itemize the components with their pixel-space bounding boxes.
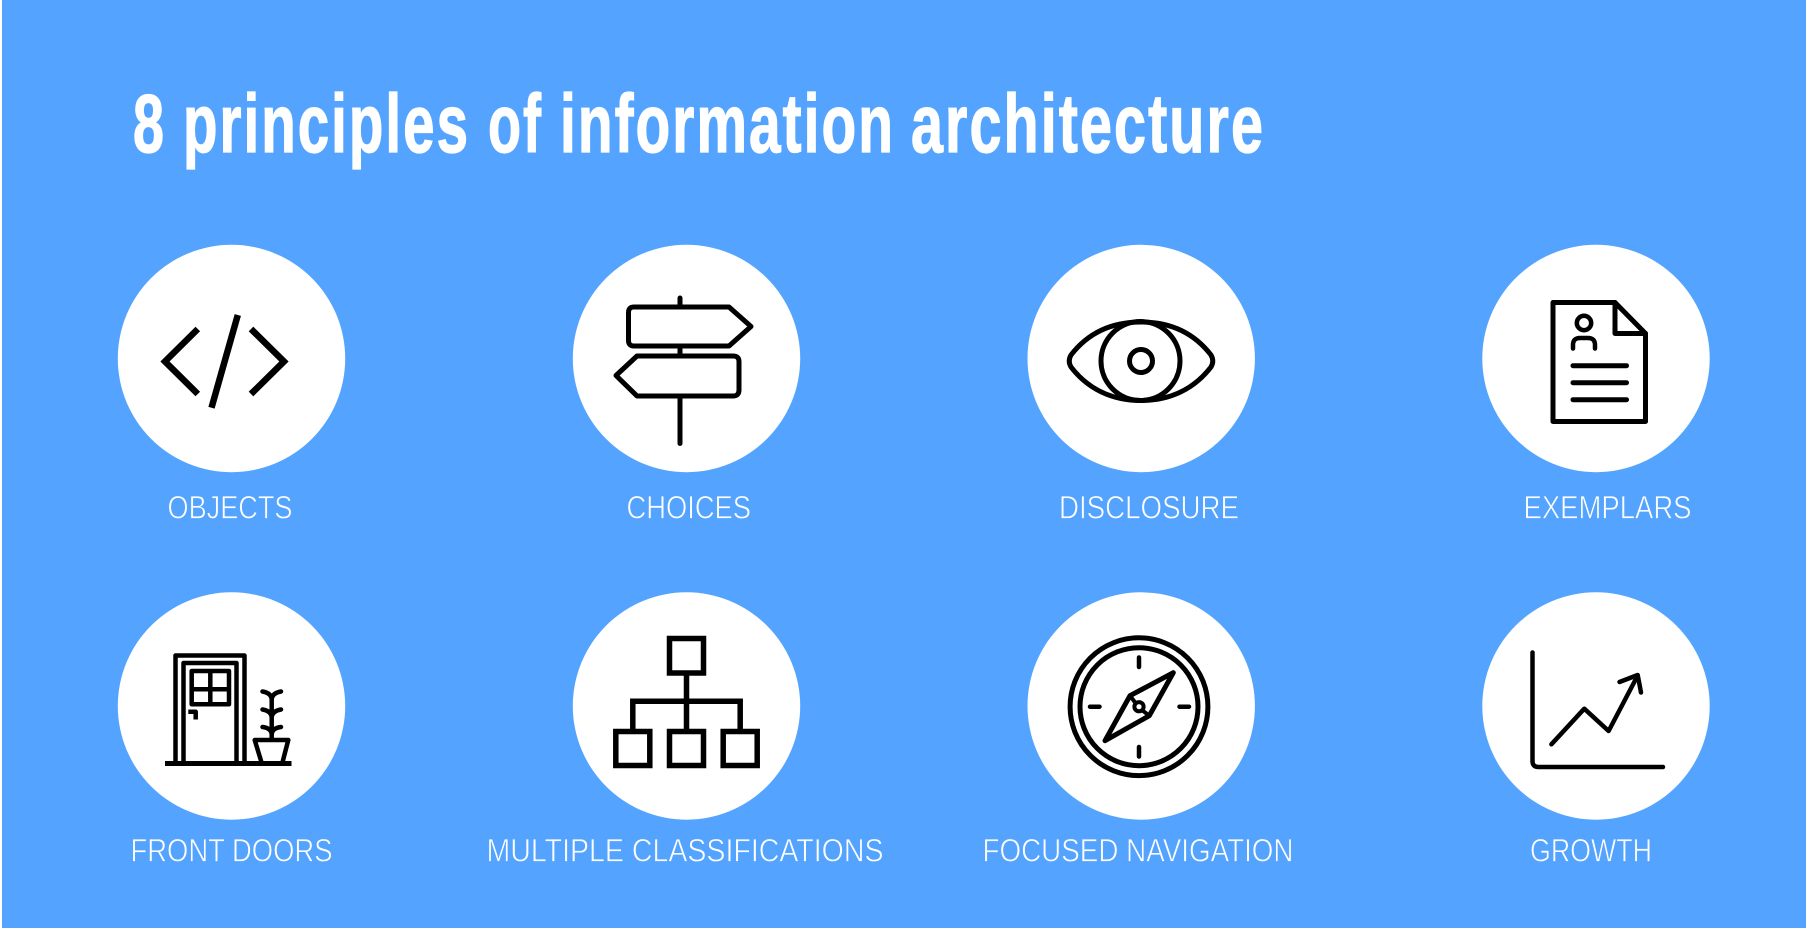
panel: objects <box>118 245 345 526</box>
icon: code brackets <box>165 315 284 408</box>
icon: compass <box>1070 638 1208 776</box>
label: front doors: FRONT DOORS <box>130 832 332 868</box>
panel: disclosure <box>1028 245 1255 526</box>
circle: choices <box>573 245 800 472</box>
label: growth: GROWTH <box>1530 832 1652 868</box>
title <box>133 77 1265 170</box>
panel: focused navigation <box>982 592 1294 868</box>
label: multiple classifications: MULTIPLE CLASSIFICATIONS <box>486 832 884 868</box>
label: choices: CHOICES <box>626 490 751 526</box>
label: exemplars: EXEMPLARS <box>1524 490 1692 526</box>
title: principles <box>183 77 470 170</box>
label: focused navigation: FOCUSED NAVIGATION <box>982 832 1294 868</box>
label: disclosure: DISCLOSURE <box>1059 490 1239 526</box>
circle: multiple classifications <box>573 592 800 820</box>
circle: focused navigation <box>1028 592 1255 820</box>
panel: multiple classifications <box>486 592 884 868</box>
icon: eye <box>1069 322 1213 400</box>
icon: document with person <box>1553 302 1646 422</box>
panel: growth <box>1482 592 1710 868</box>
panel: front doors <box>118 592 345 868</box>
icon: rising line chart <box>1532 652 1663 767</box>
title: information <box>560 77 895 170</box>
circle: exemplars <box>1482 245 1710 472</box>
label: objects: OBJECTS <box>168 490 292 526</box>
title: of <box>488 77 543 170</box>
title: architecture <box>911 77 1265 170</box>
circle: front doors <box>118 592 345 820</box>
icon: signpost <box>616 298 751 444</box>
panel: choices <box>573 245 800 526</box>
circle: objects <box>118 245 345 472</box>
title: 8 <box>133 77 166 170</box>
circle: growth <box>1482 592 1710 820</box>
icon: door and plant <box>165 656 292 764</box>
panel: exemplars <box>1482 245 1710 526</box>
circle: disclosure <box>1028 245 1255 472</box>
icon: hierarchy chart <box>616 638 757 766</box>
